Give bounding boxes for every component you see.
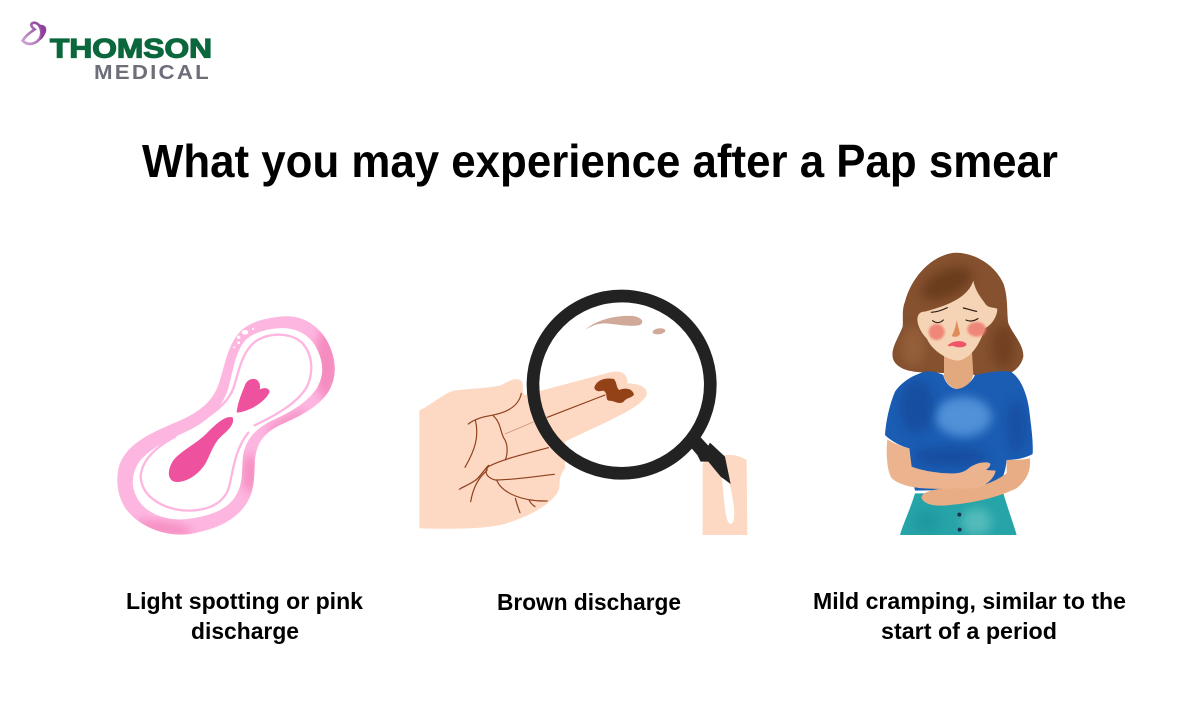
pad highlights <box>233 328 254 348</box>
label: light spotting: discharge <box>191 618 299 644</box>
skin crease lines <box>459 393 605 513</box>
pad outer shell <box>117 316 335 535</box>
blush left <box>929 324 945 340</box>
blush right <box>967 322 986 337</box>
hand <box>419 372 647 529</box>
panel: hand with magnifier <box>419 296 747 535</box>
lens glare <box>585 316 642 330</box>
pad white inner <box>133 328 322 519</box>
label: mild cramping: start of a period <box>881 618 1057 644</box>
neck <box>944 352 973 389</box>
finger tip <box>703 455 747 535</box>
face <box>917 281 997 361</box>
pad heart stain <box>237 379 269 413</box>
lower arm <box>922 458 1030 506</box>
icon: butterfly <box>23 23 46 44</box>
fingernail <box>722 478 734 524</box>
title: What you may experience after a Pap smear <box>142 135 1058 187</box>
magnifier handle <box>692 437 731 484</box>
label: mild cramping <box>813 588 1126 644</box>
lens glare small <box>652 327 666 335</box>
skirt <box>900 493 1017 535</box>
label: light spotting <box>126 588 363 644</box>
label: brown discharge: Brown discharge <box>497 589 681 615</box>
magnifier ring <box>533 296 710 473</box>
nose <box>952 320 960 337</box>
logo wordmark: THOMSON: THOMSON <box>50 34 212 64</box>
pad stitching line <box>141 335 311 511</box>
skirt buttons <box>957 513 962 532</box>
logo <box>23 23 212 84</box>
panel: sanitary pad <box>117 316 339 539</box>
hair <box>892 252 1024 376</box>
label: light spotting: Light spotting or pink <box>126 588 363 614</box>
mouth <box>948 341 967 347</box>
label: mild cramping: Mild cramping, similar to the <box>813 588 1126 614</box>
upper arm and hand <box>887 439 996 489</box>
shirt <box>885 371 1033 491</box>
brown stain <box>594 379 634 403</box>
panel: woman with cramps <box>880 250 1040 537</box>
logo wordmark: MEDICAL: MEDICAL <box>94 62 211 84</box>
pad stain <box>169 417 233 482</box>
eyes and brows <box>931 308 978 323</box>
